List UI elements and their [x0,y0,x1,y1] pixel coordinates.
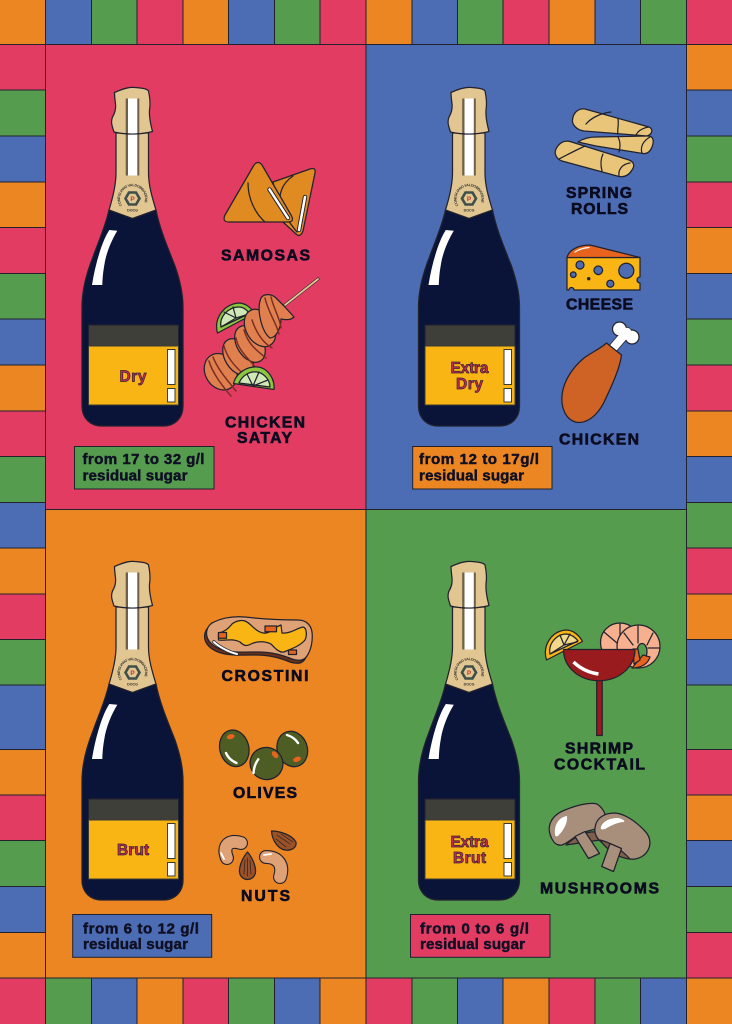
panel: dry (pink) [46,44,366,510]
text: cheese: CHEESE [566,296,633,314]
seal: P [130,670,135,677]
seal: DOCG [127,682,138,686]
text: chicken: CHICKEN [559,432,639,448]
text: samosas: SAMOSAS [221,248,310,264]
icon: shrimp cocktail [545,623,660,736]
right border of coloured tiles [686,44,732,978]
seal: P [130,196,135,203]
text: nuts: NUTS [241,888,290,905]
text: spring rolls [566,185,632,218]
text: spring rolls: ROLLS [571,201,628,218]
panel: extra brut (green) [366,510,686,978]
bottle: extra dry [418,86,520,427]
label: dark band and yellow label [88,799,178,879]
text: olives: OLIVES [233,785,297,802]
text: chicken satay: CHICKEN [225,414,305,432]
icon: spring rolls [555,109,653,177]
callout: dry residual sugar: residual sugar [82,468,188,484]
seal: CONEGLIANO VALDOBBIADENE [117,658,148,680]
text: shrimp cocktail [554,740,645,774]
seal: P [467,196,472,203]
panel: extra dry (blue) [366,44,686,510]
icon: chicken satay [198,279,318,396]
callout: extra dry residual sugar: residual sugar [419,468,524,484]
panel: brut (orange) [46,510,366,978]
icon: crostini [205,617,312,663]
seal: P [467,670,472,677]
icon: cheese [567,245,640,290]
text: chicken satay: SATAY [237,430,292,447]
callout: dry residual sugar [74,446,214,489]
left border of coloured tiles [0,44,46,978]
text: crostini: CROSTINI [222,668,308,685]
bottom border of coloured tiles [0,978,732,1024]
text: shrimp cocktail: SHRIMP [565,740,633,758]
bottle: brut [81,560,184,901]
callout: dry residual sugar: from 17 to 32 g/l [82,451,204,468]
seal: CONEGLIANO VALDOBBIADENE [117,184,148,206]
callout: extra dry residual sugar: from 12 to 17g/l [419,451,539,468]
label: dark band and yellow label: Extra [450,834,489,851]
label: dark band and yellow label: Extra [450,360,489,377]
callout: brut residual sugar: from 6 to 12 g/l [83,920,199,938]
seal: DOCG [464,208,475,212]
text: shrimp cocktail: COCKTAIL [554,756,645,774]
callout: extra brut residual sugar [410,914,550,957]
seal: DOCG [127,208,138,212]
label: dark band and yellow label [425,799,515,879]
label: dark band and yellow label: Dry [456,376,483,393]
callout: brut residual sugar: residual sugar [83,936,188,953]
callout: extra brut residual sugar: from 0 to 6 g/l [420,920,529,938]
callout: extra brut residual sugar: residual sugar [420,936,525,953]
seal: CONEGLIANO VALDOBBIADENE [454,184,484,206]
seal: DOCG [464,682,475,686]
label: dark band and yellow label: Dry [120,368,147,386]
text: chicken satay [225,414,305,447]
callout: brut residual sugar [73,914,212,957]
label: dark band and yellow label [425,325,515,405]
label: dark band and yellow label: Brut [117,842,149,859]
icon: samosas [224,162,315,235]
bottle: extra brut [418,560,520,901]
icon: olives [216,727,313,784]
icon: chicken drumstick [562,322,639,423]
callout: extra dry residual sugar [413,446,552,489]
label: dark band and yellow label [88,325,178,405]
top border of coloured tiles [0,0,732,44]
icon: mushrooms [549,803,650,872]
text: spring rolls: SPRING [566,185,632,202]
bottle: dry [81,86,184,427]
text: mushrooms: MUSHROOMS [540,880,659,898]
icon: nuts [221,831,296,880]
label: dark band and yellow label: Brut [453,850,486,867]
seal: CONEGLIANO VALDOBBIADENE [454,658,484,680]
